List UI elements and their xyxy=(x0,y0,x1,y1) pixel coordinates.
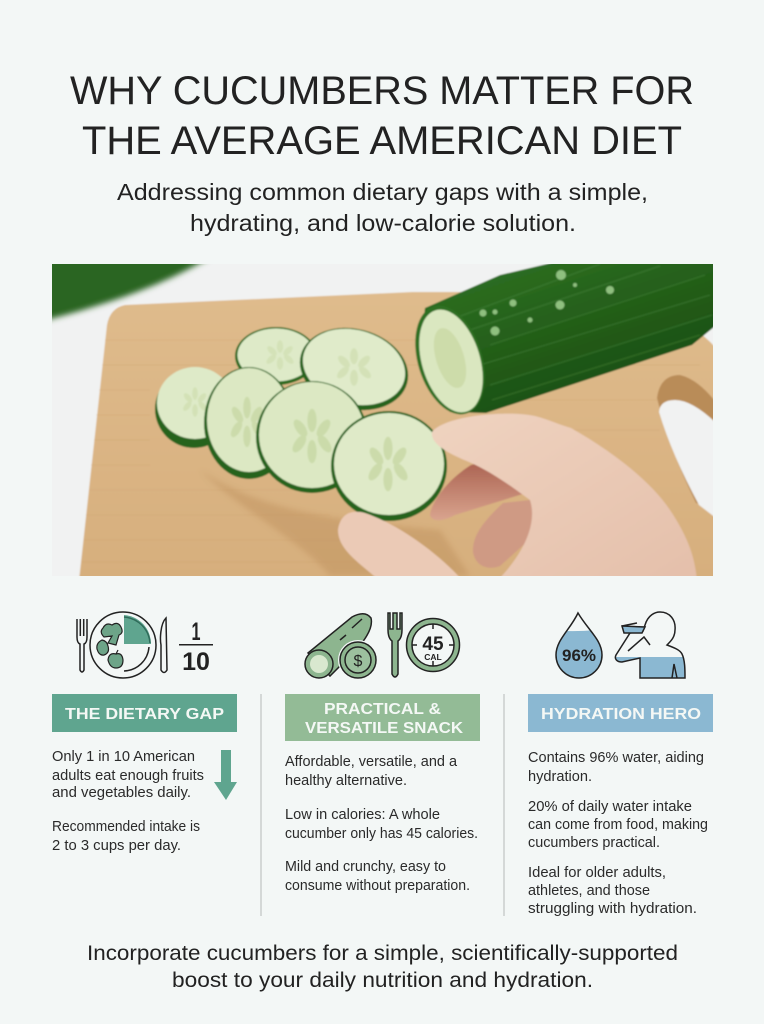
heading: practical and versatile snack: VERSATILE SNACK xyxy=(305,720,463,737)
text: hydration facts: can come from food, making xyxy=(528,816,708,833)
text: snack facts: Mild and crunchy, easy to xyxy=(285,858,446,875)
board handle xyxy=(656,374,713,504)
text: hydration facts: hydration. xyxy=(528,768,592,785)
title xyxy=(70,69,694,163)
cucumber slices xyxy=(155,316,447,521)
heading: hydration hero: HYDRATION HERO xyxy=(541,706,701,723)
text: dietary gap facts: Only 1 in 10 American xyxy=(52,748,195,765)
panel: the dietary gap xyxy=(52,694,237,854)
footer message: Incorporate cucumbers for a simple, scientifically-supported xyxy=(87,942,678,965)
text: hydration facts: Contains 96% water, aiding xyxy=(528,749,704,766)
text: hydration facts: athletes, and those xyxy=(528,882,650,899)
wood grain xyxy=(96,414,98,416)
text: dietary gap facts xyxy=(52,748,204,854)
title: THE AVERAGE AMERICAN DIET xyxy=(82,119,682,163)
photo: hand holding cucumber slice on cutting board xyxy=(52,264,713,576)
cutting board xyxy=(78,292,725,590)
subtitle: hydrating, and low-calorie solution. xyxy=(190,210,576,236)
title: WHY CUCUMBERS MATTER FOR xyxy=(70,69,694,113)
shadow under slices xyxy=(214,480,466,576)
subtitle xyxy=(117,179,648,236)
heading: practical and versatile snack: PRACTICAL & xyxy=(324,701,441,718)
icon: cucumber, coin, fork and calorie timer xyxy=(305,613,460,680)
text: snack facts: Affordable, versatile, and a xyxy=(285,753,458,770)
text: dietary gap facts: and vegetables daily. xyxy=(52,784,191,801)
text: hydration facts: 20% of daily water intake xyxy=(528,798,692,815)
text: snack facts xyxy=(285,753,478,894)
fraction one in ten xyxy=(179,618,213,676)
footer message xyxy=(87,942,678,992)
text: hydration facts xyxy=(528,749,708,917)
icon: cucumber, coin, fork and calorie timer: $ xyxy=(354,653,363,670)
panel: hydration hero xyxy=(528,694,713,917)
text: snack facts: healthy alternative. xyxy=(285,772,407,789)
arrow: down xyxy=(214,750,237,800)
footer message: boost to your daily nutrition and hydration. xyxy=(172,969,593,992)
icon: person drinking water xyxy=(615,612,685,678)
panel: practical and versatile snack xyxy=(285,694,480,894)
icon: cucumber, coin, fork and calorie timer: CAL xyxy=(424,652,442,662)
heading: hydration hero xyxy=(528,694,713,732)
blurred cucumber in background xyxy=(52,264,208,324)
icon: water drop 96% xyxy=(556,613,602,678)
icon: cucumber, coin, fork and calorie timer: 45 xyxy=(422,634,444,655)
text: dietary gap facts: 2 to 3 cups per day. xyxy=(52,837,181,854)
ring finger xyxy=(472,500,532,568)
palm and index finger xyxy=(432,414,697,580)
heading: the dietary gap: THE DIETARY GAP xyxy=(65,706,224,723)
thumb xyxy=(338,512,462,580)
big cucumber xyxy=(414,264,713,416)
fraction one in ten: 1 xyxy=(192,618,201,646)
fraction one in ten: 10 xyxy=(182,648,210,676)
text: dietary gap facts: Recommended intake is xyxy=(52,818,200,835)
text: snack facts: Low in calories: A whole xyxy=(285,806,440,823)
icon: water drop 96%: 96% xyxy=(562,646,596,665)
heading: the dietary gap xyxy=(52,694,237,732)
heading: practical and versatile snack xyxy=(285,694,480,741)
text: hydration facts: struggling with hydration. xyxy=(528,900,697,917)
icon: plate with fork, knife and food xyxy=(77,612,167,678)
middle finger xyxy=(430,464,522,520)
text: snack facts: consume without preparation. xyxy=(285,877,470,894)
text: dietary gap facts: adults eat enough fruits xyxy=(52,767,204,784)
text: snack facts: cucumber only has 45 calories. xyxy=(285,825,478,842)
text: hydration facts: cucumbers practical. xyxy=(528,834,660,851)
text: hydration facts: Ideal for older adults, xyxy=(528,864,666,881)
hand xyxy=(338,414,697,580)
subtitle: Addressing common dietary gaps with a simple, xyxy=(117,179,648,205)
